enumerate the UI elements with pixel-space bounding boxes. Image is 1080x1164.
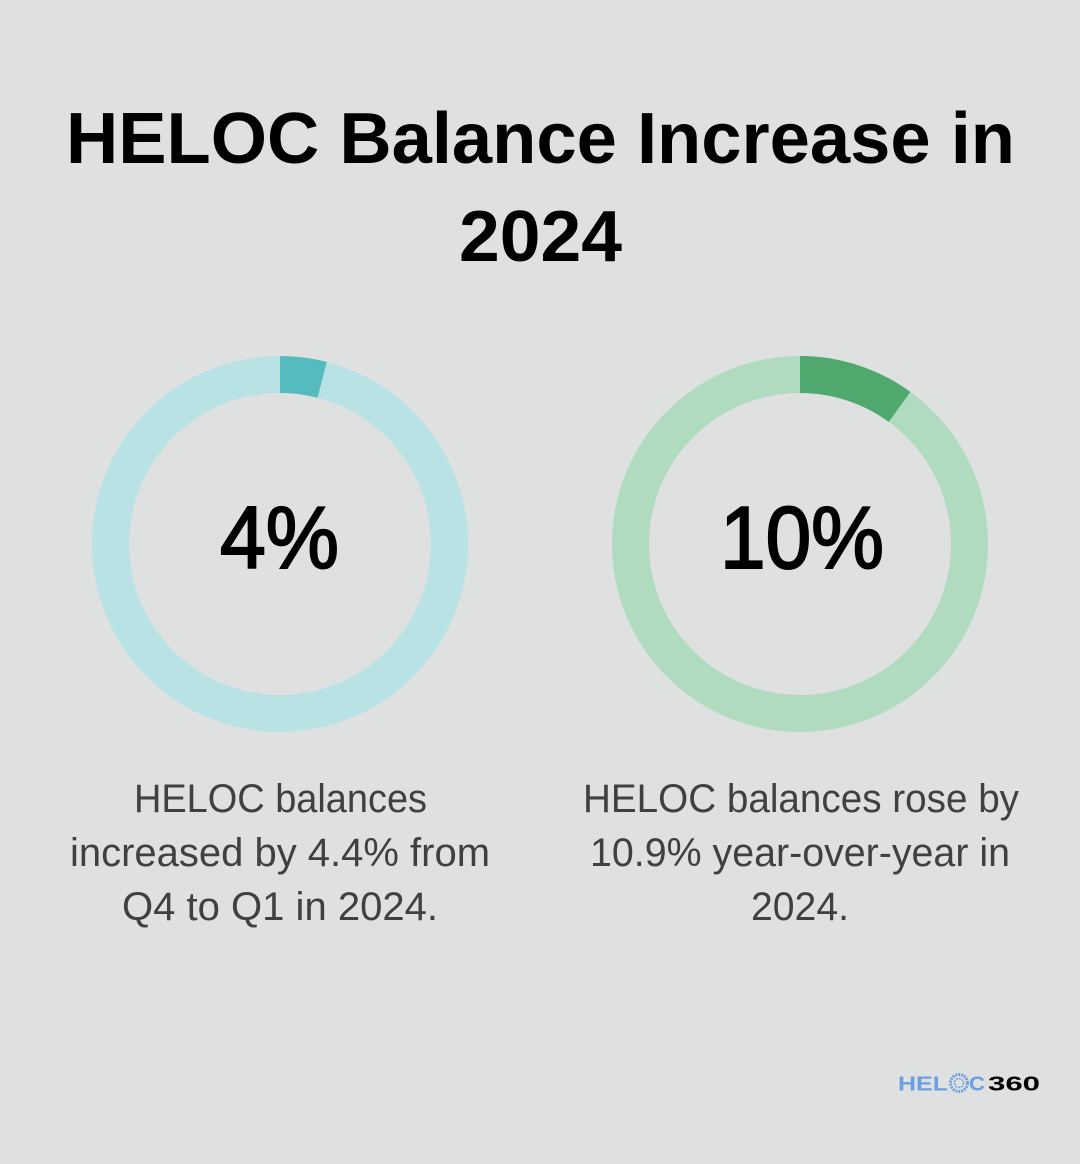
logo: HELOC360: C: [969, 1074, 985, 1096]
title: [66, 99, 1015, 277]
logo: HELOC360: [898, 1074, 1040, 1096]
description: 10% stat: [583, 777, 1019, 929]
donut chart: 10%: [630, 374, 970, 714]
value: 10%: 10%: [720, 488, 884, 587]
description: 4% stat: increased by 4.4% from: [70, 831, 490, 875]
description: 10% stat: 2024.: [751, 885, 849, 929]
icon: swirl O: [950, 1074, 968, 1092]
description: 10% stat: HELOC balances rose by: [583, 777, 1019, 821]
title: 2024: [459, 197, 622, 277]
logo: HELOC360: HEL: [898, 1074, 948, 1096]
description: 4% stat: [70, 777, 490, 929]
panel: 10% stat: [583, 374, 1019, 929]
description: 10% stat: 10.9% year-over-year in: [590, 831, 1010, 875]
description: 4% stat: HELOC balances: [134, 777, 427, 821]
title: HELOC Balance Increase in: [66, 99, 1015, 179]
description: 4% stat: Q4 to Q1 in 2024.: [122, 885, 438, 929]
panel: 4% stat: [70, 374, 490, 929]
donut chart: 4%: [110, 374, 450, 714]
logo: HELOC360: 360: [988, 1074, 1040, 1096]
value: 4%: 4%: [220, 488, 339, 587]
